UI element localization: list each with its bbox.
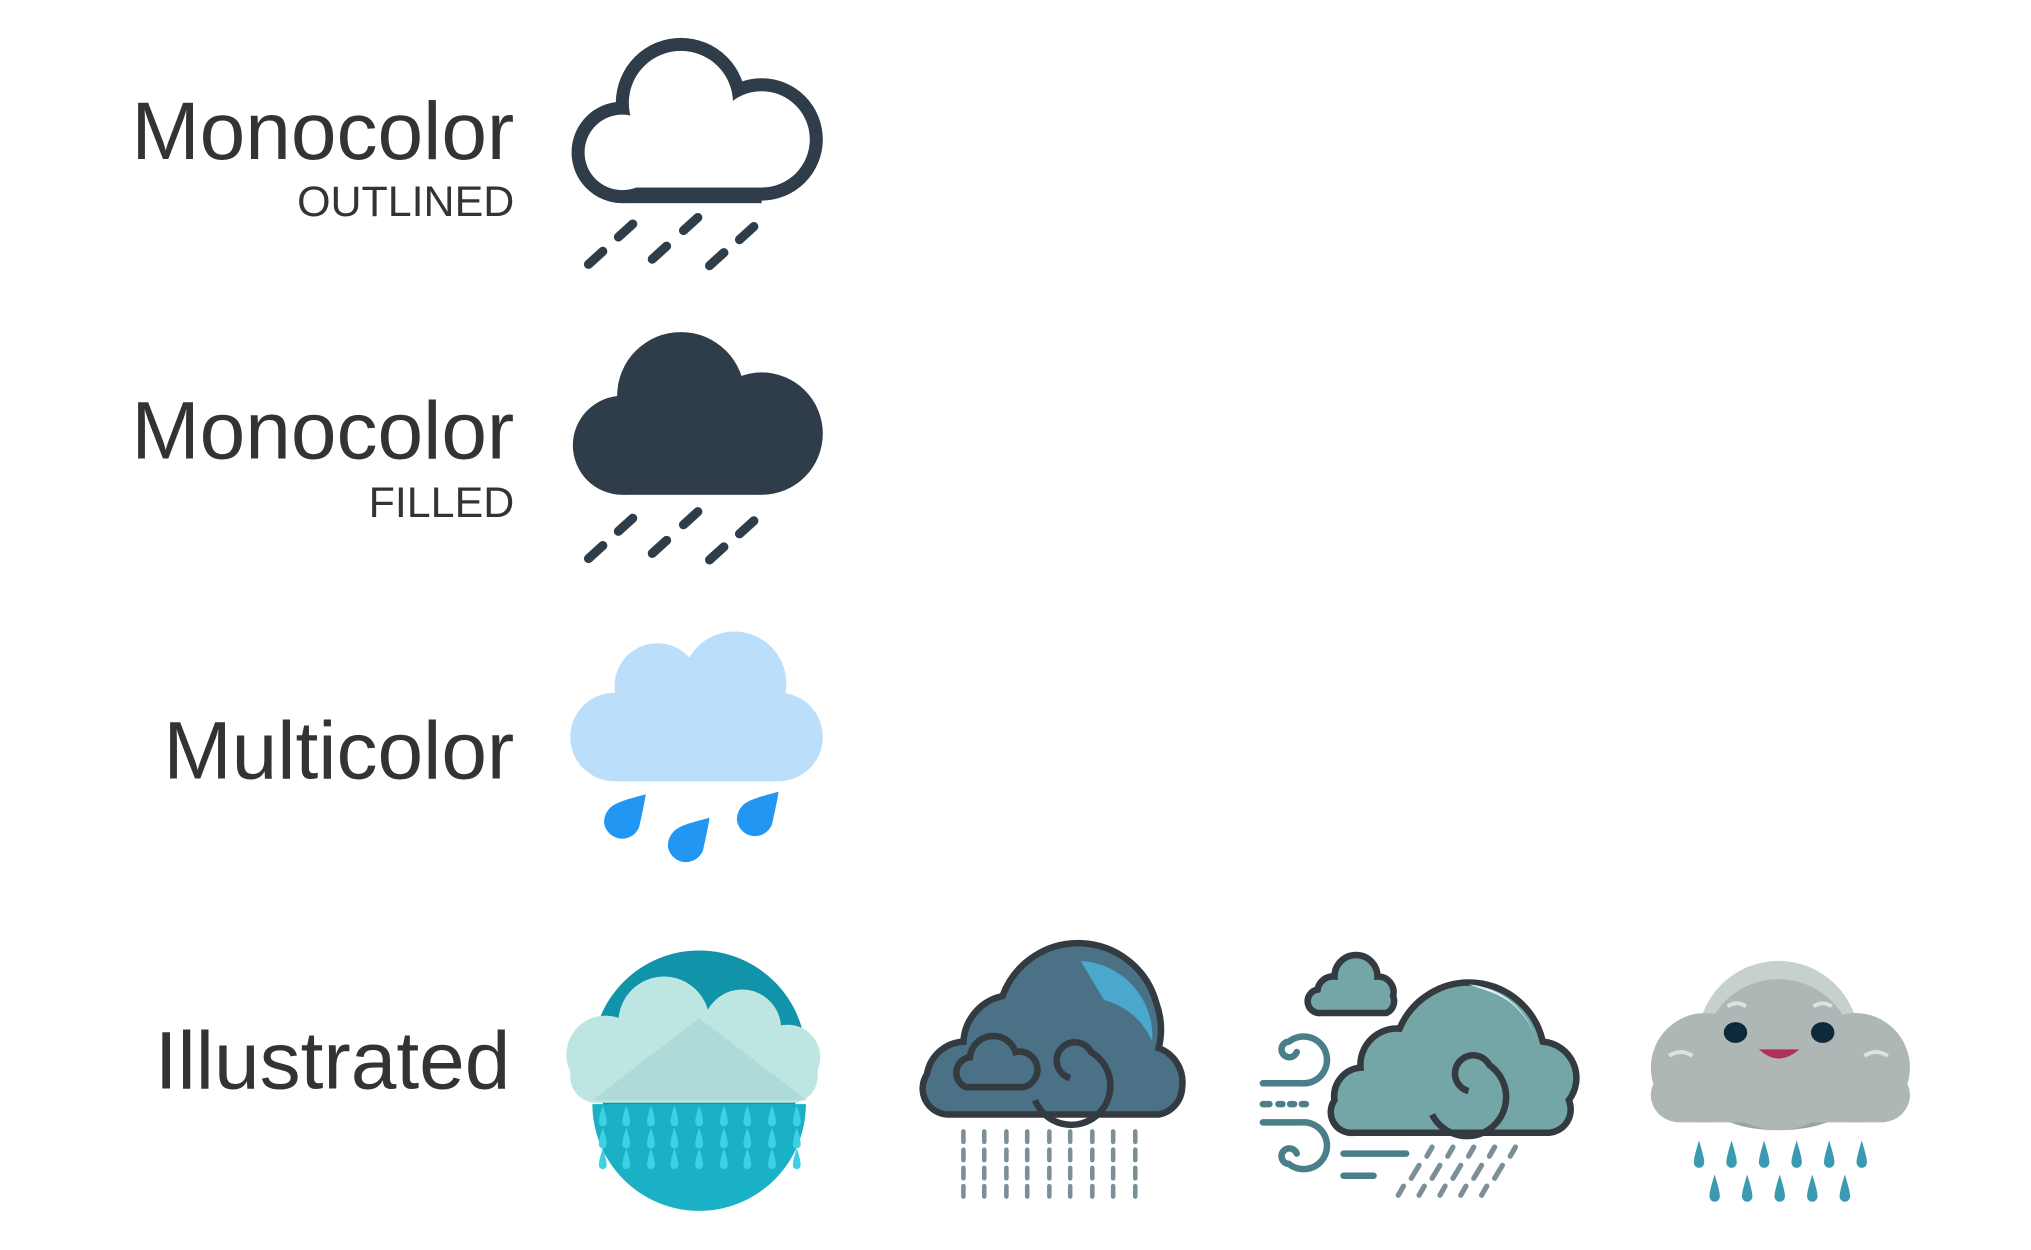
label: Illustrated: Illustrated	[155, 1015, 510, 1106]
label: Monocolor filled: FILLED	[369, 479, 514, 527]
label: Monocolor outlined: OUTLINED	[297, 178, 514, 226]
icon: illustrated 3 windy cloud	[1263, 955, 1576, 1195]
label: Monocolor outlined	[131, 86, 514, 226]
icon: outlined rain cloud	[572, 38, 823, 266]
label: Multicolor: Multicolor	[163, 706, 514, 797]
icon: illustrated 1 circle rain cloud	[566, 950, 820, 1211]
label: Monocolor filled	[131, 385, 514, 527]
label: Monocolor filled: Monocolor	[131, 385, 514, 476]
label: Monocolor outlined: Monocolor	[131, 86, 514, 177]
icon: multicolor rain cloud	[570, 632, 823, 862]
icon: illustrated 4 smiling cloud	[1651, 961, 1910, 1202]
icon: illustrated 2 dark swirl cloud	[923, 943, 1182, 1198]
icon: filled rain cloud	[573, 332, 823, 560]
